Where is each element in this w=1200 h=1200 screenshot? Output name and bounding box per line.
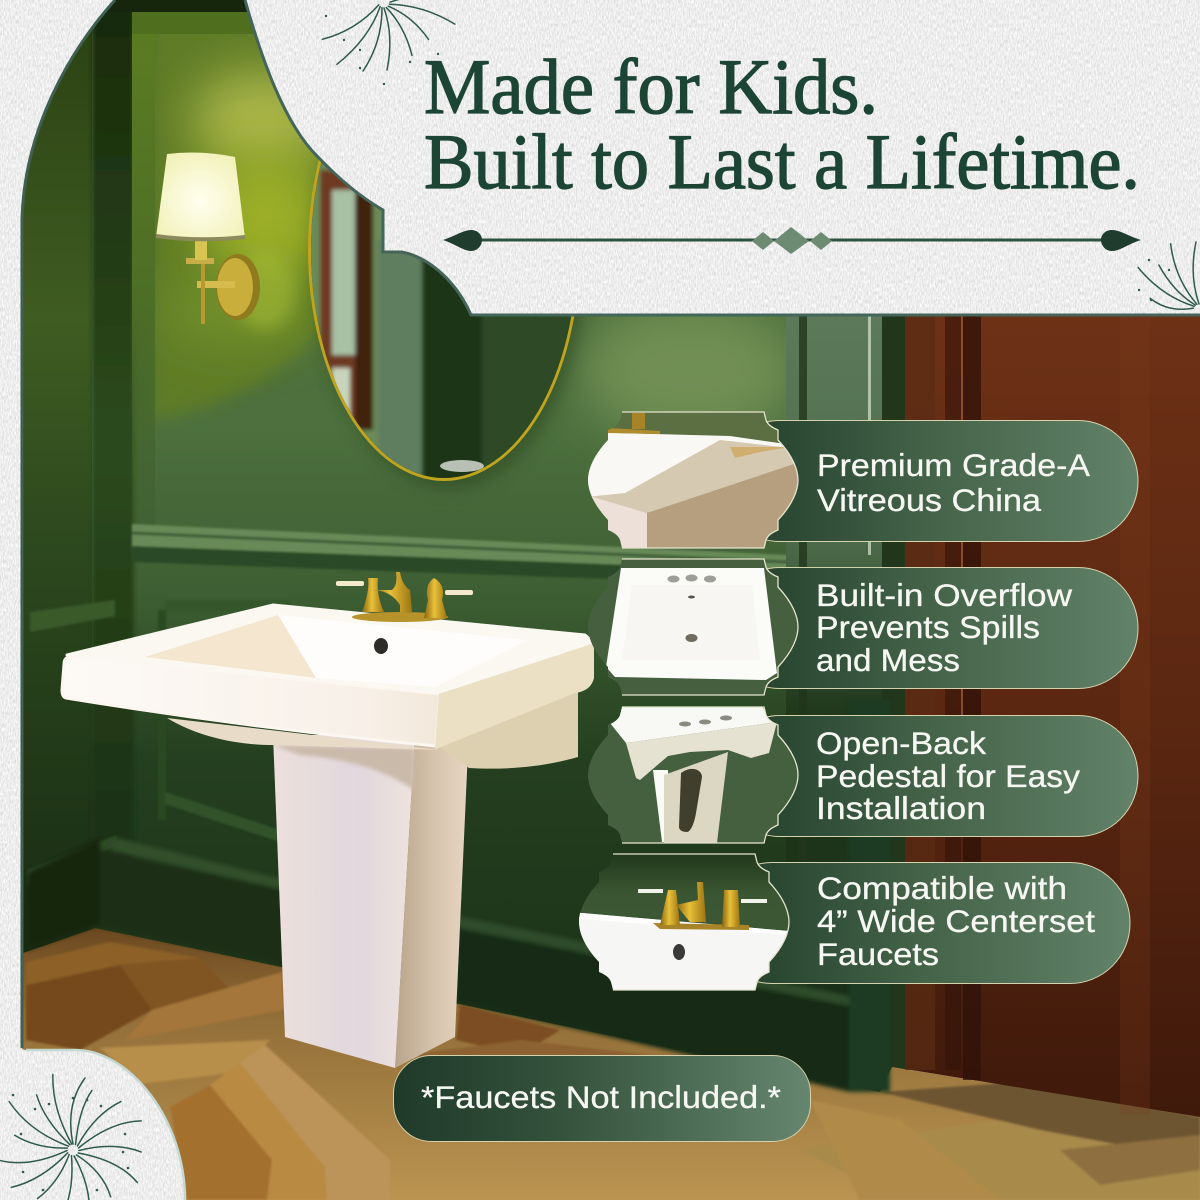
pill (720, 420, 1138, 542)
pill (720, 568, 1138, 688)
right wall section (786, 315, 910, 1075)
bottom-left paper corner (0, 1050, 185, 1200)
pedestal column (273, 735, 468, 1068)
feature 2: overflow (580, 555, 1138, 700)
lower wall panels (27, 600, 290, 884)
starburst ornament top (320, 0, 456, 85)
pedestal sink (62, 605, 593, 1068)
feature 1: vitreous china (580, 405, 1138, 555)
basin left slope (145, 615, 316, 678)
thumbnail outline (613, 854, 789, 990)
wall glow by the lamp (155, 34, 319, 422)
text: Compatible with (817, 870, 1067, 906)
left wall strip (24, 31, 92, 952)
text: Installation (816, 790, 986, 826)
thumbnail: pedestal back (588, 707, 798, 842)
starburst ornament bottom (0, 1074, 143, 1200)
text (816, 577, 1072, 678)
text: Open-Back (816, 725, 986, 761)
wall sconce lamp (156, 153, 295, 330)
text: and Mess (816, 642, 960, 678)
corner edge (26, 1050, 185, 1200)
text (816, 725, 1080, 826)
pill (720, 716, 1138, 836)
thumbnail outline (622, 412, 798, 548)
header panel (245, 0, 1200, 315)
baseboard (27, 700, 890, 1092)
thumbnail: sink rim close-up (588, 412, 798, 548)
wooden door (905, 315, 1200, 1117)
note text: *Faucets Not Included.* (421, 1079, 781, 1115)
herringbone floor planks (26, 942, 1200, 1200)
overflow hole (374, 638, 388, 654)
text: Prevents Spills (816, 609, 1040, 645)
thumbnail: sink top view (588, 560, 798, 694)
basin (278, 616, 526, 687)
horizontal chair rail molding (131, 523, 786, 580)
thumbnail outline (622, 559, 798, 695)
text: Faucets (817, 936, 939, 972)
wall (0, 0, 910, 1120)
corner shape (0, 1050, 185, 1200)
mirror (306, 160, 586, 491)
thumbnail: faucet close-up (579, 864, 788, 990)
vertical molding (114, 0, 254, 477)
text: Premium Grade-A (817, 447, 1090, 483)
title: Made for Kids. (424, 43, 878, 130)
sink top deck (67, 605, 593, 692)
sink front face (62, 656, 440, 746)
text: Built-in Overflow (816, 577, 1072, 613)
sink right face (436, 642, 593, 748)
title: Built to Last a Lifetime. (424, 118, 1140, 205)
faucets note pill (394, 1056, 810, 1142)
sink underside and shroud (167, 685, 578, 769)
text: Pedestal for Easy (816, 758, 1080, 794)
pill (712, 862, 1130, 984)
floor (0, 928, 1200, 1200)
wall light on the right of the mirror (570, 316, 786, 434)
panel edge (245, 0, 1200, 315)
feature 4: centerset faucets (570, 850, 1130, 995)
thumbnail outline (622, 707, 798, 843)
dark corner strip (92, 0, 134, 880)
title (424, 43, 1140, 205)
text (817, 870, 1095, 972)
starburst ornament right (1136, 242, 1199, 315)
photo arch outline (22, 0, 115, 1048)
faucet on the sink (336, 572, 473, 622)
text: Vitreous China (817, 482, 1042, 518)
note background (394, 1056, 810, 1142)
text: 4” Wide Centerset (817, 903, 1095, 939)
text (817, 447, 1090, 518)
decorative arrow divider (443, 227, 1141, 254)
feature 3: open-back pedestal (580, 700, 1138, 850)
panel shape (245, 0, 1200, 315)
